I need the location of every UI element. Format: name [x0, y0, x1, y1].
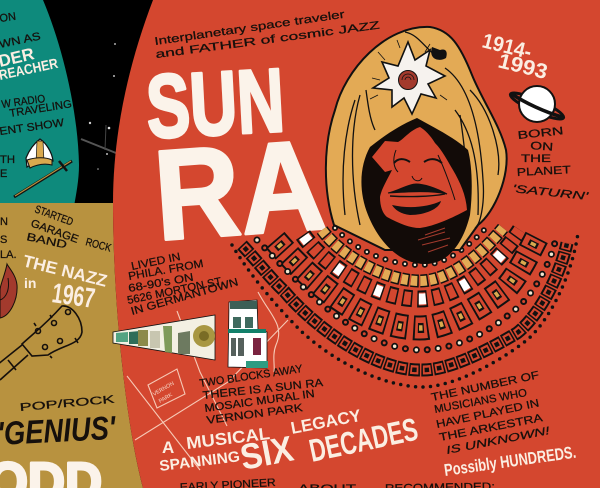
teal panel text: ENT SHOW [0, 117, 65, 138]
heading: musical legacy: SPANNING [158, 448, 241, 475]
illustration: Sun Ra portrait [326, 27, 507, 264]
gold panel text: LA. [0, 249, 17, 261]
teal panel text: E [0, 168, 7, 180]
text: lived in Philadelphia [126, 251, 240, 318]
text: lived in Philadelphia: 5626 MORTON ST. [126, 275, 225, 307]
collar: large framed beads [275, 235, 538, 328]
dates: 1914- [480, 30, 534, 64]
gold panel text [0, 204, 117, 488]
text: lived in Philadelphia: IN GERMANTOWN [130, 276, 240, 318]
heading: musical legacy: A [162, 438, 174, 457]
gold panel text: in [24, 275, 36, 291]
cut-off bottom text [180, 477, 495, 488]
text: mosaic mural note: MOSAIC MURAL IN [204, 388, 315, 415]
teal panel text: TH [0, 154, 15, 166]
title: SUN RA: RA [150, 113, 330, 268]
text: number of musicians: THE ARKESTRA [438, 412, 544, 444]
icon: Vernon Park sign: VERNON [152, 381, 175, 398]
map lines [127, 292, 288, 470]
gold panel text: GARAGE [29, 218, 80, 246]
text: number of musicians: HAVE PLAYED IN [435, 397, 540, 431]
collar: yellow beads [322, 228, 503, 281]
heading: musical legacy: DECADES [306, 411, 421, 469]
teal panel text [0, 11, 73, 180]
text: lived in Philadelphia: LIVED IN [130, 251, 182, 273]
gold panel text: STARTED [33, 204, 75, 229]
text: number of musicians [430, 369, 577, 480]
title: SUN RA [144, 51, 330, 268]
icon: Saturn [508, 86, 566, 123]
black shadow and beard [361, 118, 472, 264]
text: number of musicians: MUSICIANS WHO [433, 387, 528, 416]
text: number of musicians: IS UNKNOWN! [445, 425, 551, 457]
text: born on Saturn: THE [521, 153, 551, 165]
text: number of musicians: THE NUMBER OF [430, 369, 541, 404]
text: born on Saturn [512, 125, 590, 203]
collar: spiral beads [242, 243, 567, 370]
icon: white star jewel [370, 40, 447, 114]
text: lived in Philadelphia: PHILA. FROM [127, 258, 204, 283]
panel: teal preacher section [0, 0, 79, 206]
teal panel text: TRAVELING [9, 98, 73, 120]
text: born on Saturn: 'SATURN' [512, 183, 590, 203]
icon: Vernon Park sign: PARK [158, 392, 174, 405]
panel: gold Todd Rundgren section [0, 203, 143, 488]
gold panel text: N [0, 216, 8, 228]
collar: small dot row [335, 226, 488, 265]
collar: middle dot row [257, 240, 555, 350]
intro heading: and FATHER of cosmic JAZZ [155, 20, 381, 61]
headdress fold lines [343, 32, 499, 228]
gold panel text: BAND [25, 231, 68, 251]
gold panel text: THE NAZZ [21, 251, 109, 291]
text: born on Saturn: PLANET [517, 164, 571, 179]
heading: musical legacy: LEGACY [289, 406, 363, 438]
collar: outer dot row [232, 233, 578, 387]
dates: 1993 [496, 50, 550, 84]
text: mosaic mural note: TWO BLOCKS AWAY [199, 363, 304, 390]
text: lived in Philadelphia: 68-90's ON [127, 272, 195, 295]
text: mosaic mural note: VERNON PARK [206, 402, 304, 427]
gold panel text: POP/ROCK [19, 394, 116, 414]
illustration: row house [228, 300, 268, 368]
facial features [388, 150, 455, 215]
heading: musical legacy [158, 406, 421, 478]
icon: guitar headstock [0, 306, 82, 380]
text: born on Saturn: ON [530, 140, 554, 154]
text: born on Saturn: BORN [517, 125, 564, 142]
gold panel text: ROCK [84, 236, 113, 255]
gold panel text: 1967 [50, 277, 97, 314]
title: SUN RA: SUN [144, 51, 287, 158]
icon: Vernon Park sign [148, 369, 185, 408]
icon: red flame [0, 264, 17, 318]
icon: sword [14, 161, 72, 197]
intro heading [154, 9, 381, 61]
dates [480, 30, 550, 84]
teal panel text: W RADIO [1, 93, 46, 111]
text: mosaic mural note [199, 363, 324, 427]
icon: bishop mitre [26, 139, 53, 168]
text: mosaic mural note: THERE IS A SUN RA [202, 377, 324, 402]
intro heading: Interplanetary space traveler [154, 9, 346, 48]
heading: musical legacy: MUSICAL [185, 424, 271, 453]
face [372, 127, 467, 228]
gold panel text: S [0, 234, 7, 246]
illustration: mosaic mural [113, 315, 215, 360]
illustration: beaded collar [232, 226, 578, 387]
gold panel text: 'GENIUS' [0, 409, 117, 452]
headdress [326, 27, 507, 250]
collar: white and outlined beads [303, 230, 520, 299]
heading: musical legacy: SIX [237, 428, 297, 478]
